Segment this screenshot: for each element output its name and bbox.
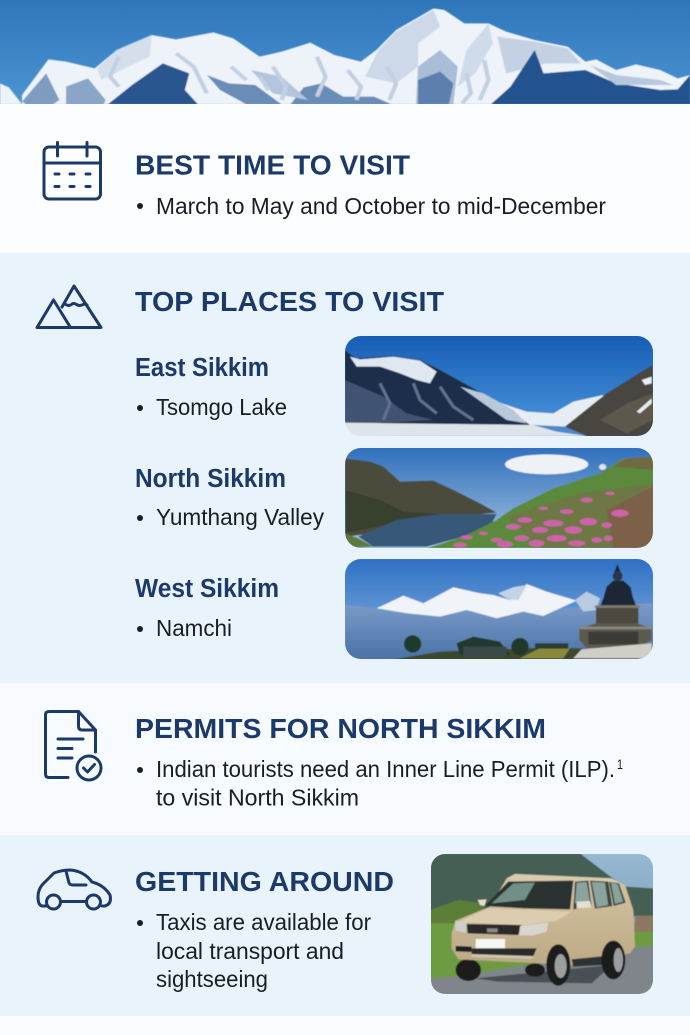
icon: car [38, 870, 110, 909]
panel: permits for north sikkim [0, 683, 690, 835]
photo: yumthang valley [343, 447, 657, 550]
photo: taxi car [430, 853, 654, 995]
text: west sikkim: West Sikkim [135, 575, 279, 603]
icon: calendar [44, 142, 100, 199]
bullet: permit text [137, 756, 623, 810]
bullet: permit text: 1 [617, 756, 623, 772]
bullet: taxis text: local transport and [156, 938, 344, 964]
heading: permits for north sikkim: PERMITS FOR NORTH SIKKIM [135, 713, 546, 744]
bullet: taxis text: sightseeing [156, 966, 268, 992]
text: west sikkim: Namchi [156, 615, 232, 641]
panel: best time to visit [0, 104, 690, 253]
text: east sikkim: East Sikkim [135, 354, 269, 382]
photo: tsomgo lake [343, 333, 657, 440]
bullet: permit text: Indian tourists need an Inner Line Permit (ILP). [156, 756, 615, 782]
heading: top places to visit: TOP PLACES TO VISIT [135, 286, 444, 317]
bullet: permit text: to visit North Sikkim [156, 784, 359, 810]
hero: snow mountain banner [0, 0, 690, 104]
text: north sikkim [135, 465, 324, 530]
bullet: best time text: March to May and October to mid-December [156, 193, 606, 219]
panel: getting around [0, 835, 690, 1016]
icon: mountains [37, 286, 101, 328]
text: north sikkim: North Sikkim [135, 465, 286, 493]
heading: getting around: GETTING AROUND [135, 866, 394, 897]
bullet: taxis text [137, 909, 371, 992]
text: east sikkim [135, 354, 287, 420]
text: west sikkim [135, 575, 279, 641]
panel: top places to visit [0, 253, 690, 683]
icon: permit document [46, 712, 101, 780]
panel: bottom strip [0, 1016, 690, 1035]
heading: best time to visit: BEST TIME TO VISIT [135, 150, 410, 180]
text: north sikkim: Yumthang Valley [156, 504, 324, 530]
bullet: taxis text: Taxis are available for [156, 909, 371, 935]
text: east sikkim: Tsomgo Lake [156, 394, 287, 420]
photo: namchi [343, 558, 657, 662]
